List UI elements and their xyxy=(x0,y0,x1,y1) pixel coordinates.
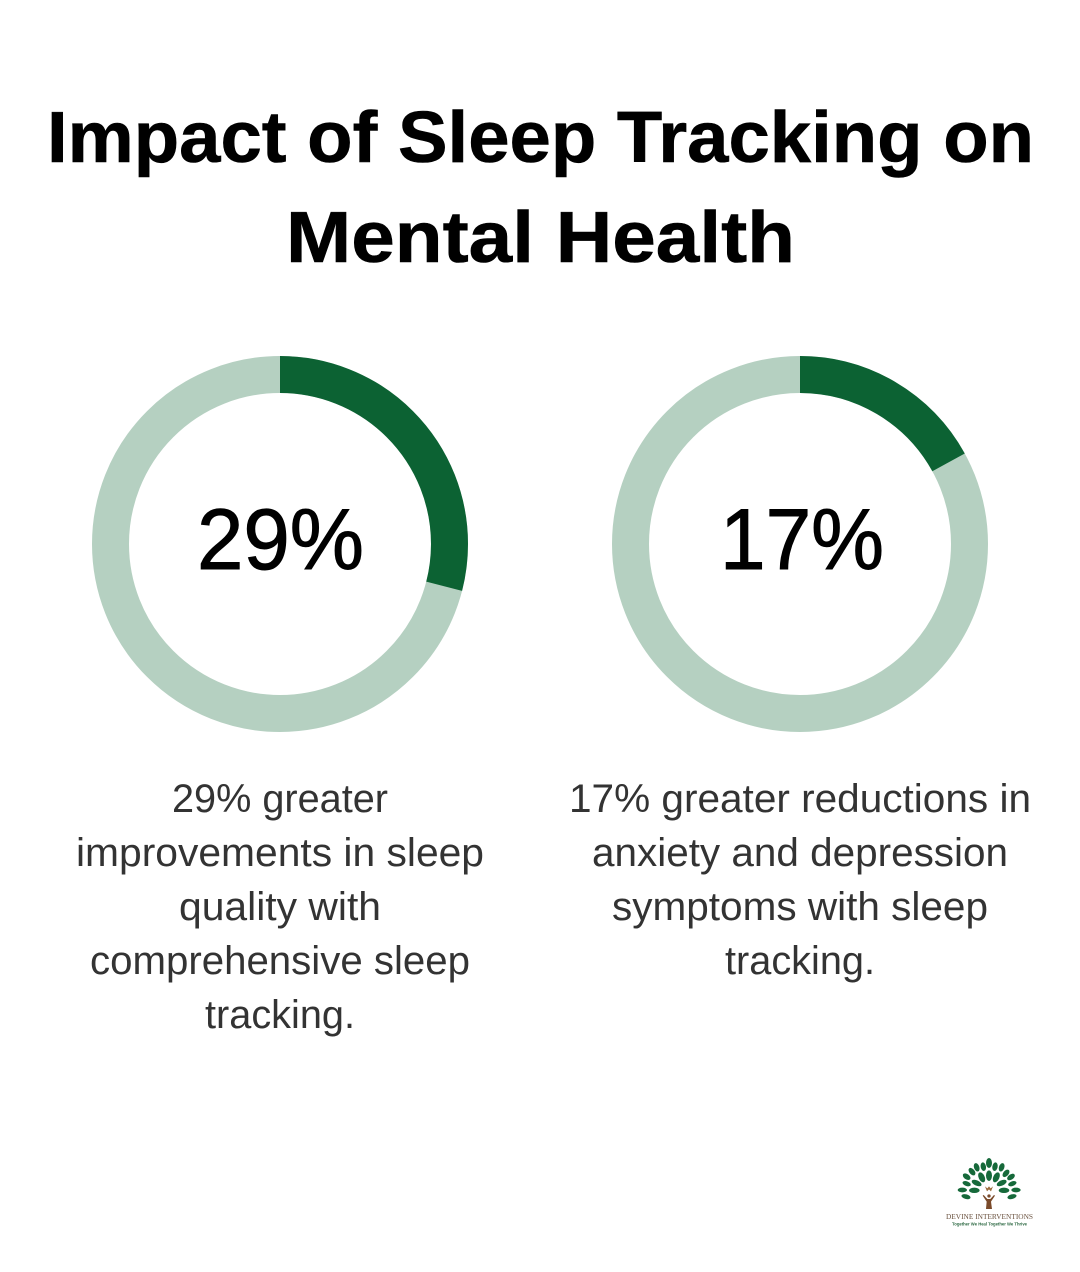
donut chart: 17% xyxy=(630,374,970,714)
logo name: DEVINE INTERVENTIONS xyxy=(946,1213,1033,1221)
text block: 29% description: 29% greater xyxy=(172,777,388,821)
text block: 29% description: quality with xyxy=(179,885,381,929)
text block: 17% description: 17% greater reductions in xyxy=(569,777,1031,821)
title xyxy=(47,98,1034,278)
donut chart: 29% xyxy=(110,374,450,714)
text block: 29% description: tracking. xyxy=(205,993,355,1037)
title: Impact of Sleep Tracking on xyxy=(47,98,1034,178)
text block: 29% description: comprehensive sleep xyxy=(90,939,470,983)
icon: tree xyxy=(958,1158,1021,1209)
title: Mental Health xyxy=(286,198,795,278)
text block: 17% description: symptoms with sleep xyxy=(612,885,988,929)
value: 29%: 29% xyxy=(197,492,364,588)
text block: 29% description: improvements in sleep xyxy=(76,831,484,875)
text block: 17% description: anxiety and depression xyxy=(592,831,1008,875)
logo tagline: Together We Heal Together We Thrive xyxy=(952,1222,1027,1226)
text block: 17% description xyxy=(569,777,1031,983)
text block: 29% description xyxy=(76,777,484,1037)
logo: Devine Interventions xyxy=(946,1158,1033,1226)
value: 17%: 17% xyxy=(720,492,884,588)
text block: 17% description: tracking. xyxy=(725,939,875,983)
